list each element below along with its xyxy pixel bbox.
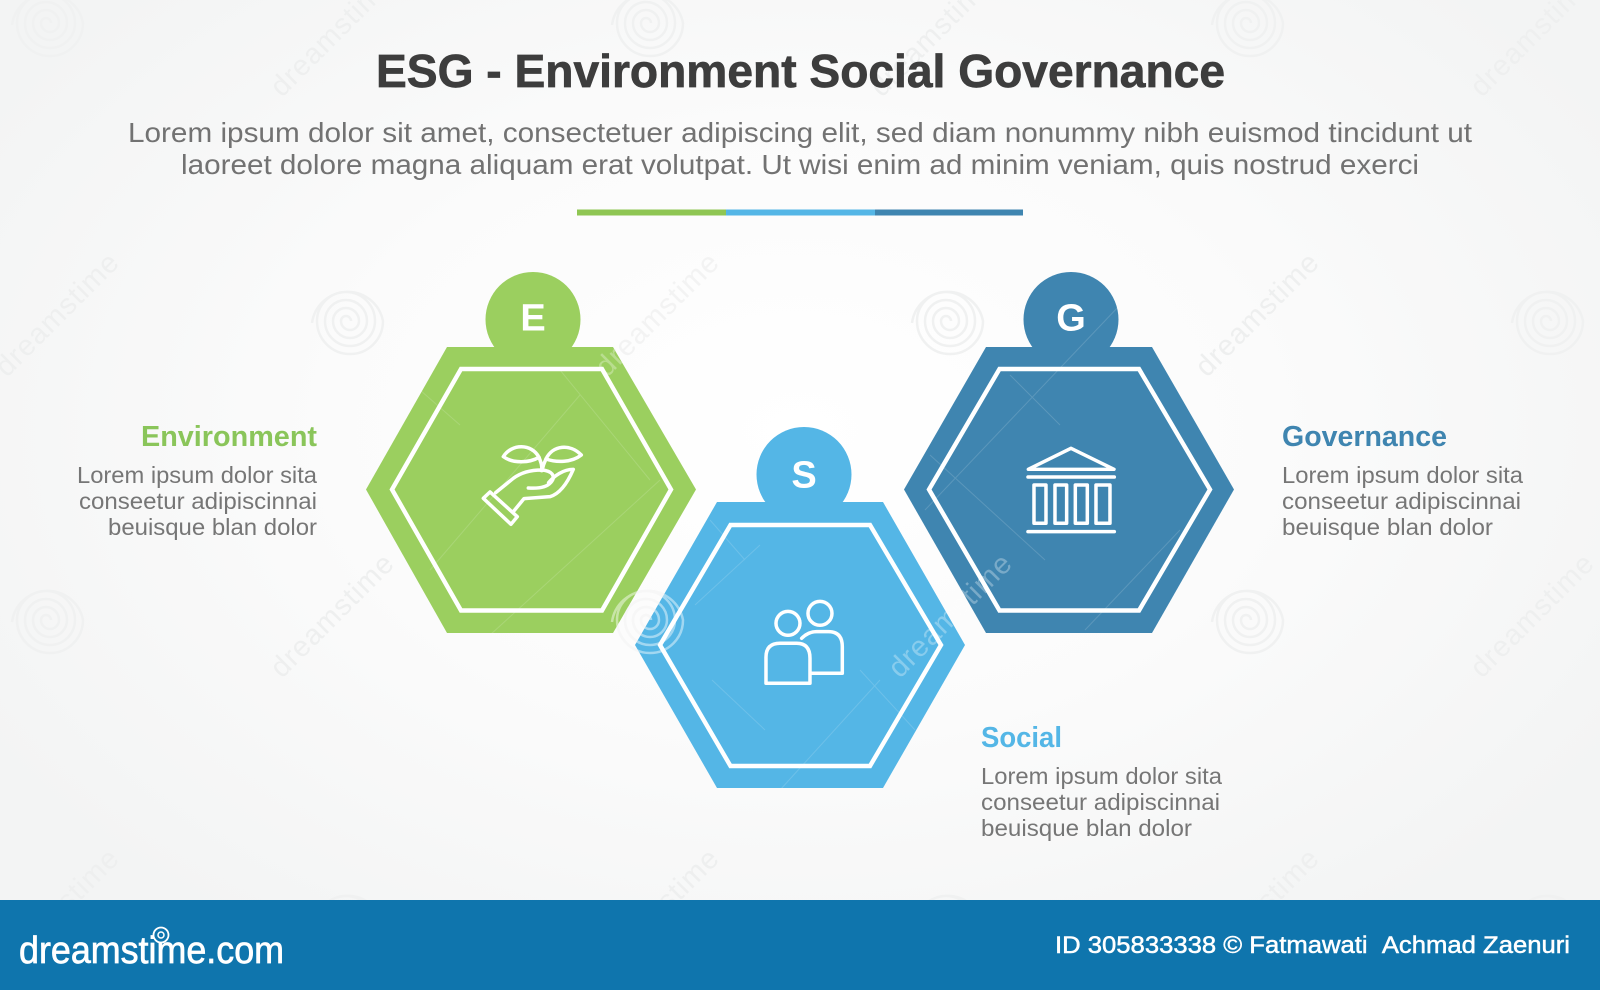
badge circle: E <box>486 272 580 367</box>
icon: hand holding plant <box>483 447 581 524</box>
text block: governance: beuisque blan dolor <box>1282 514 1493 540</box>
text block: governance: Governance <box>1282 421 1447 453</box>
text block: social: Social <box>981 722 1062 754</box>
badge circle: G <box>1024 272 1118 367</box>
subtitle text: laoreet dolore magna aliquam erat volutpat. Ut wisi enim ad minim veniam, quis nostrud exerci <box>181 149 1419 180</box>
watermark pattern: dreamstime <box>264 547 401 684</box>
letter E: E <box>520 298 546 340</box>
letter S: S <box>791 454 817 496</box>
text block: governance: conseetur adipiscinnai <box>1282 488 1521 514</box>
panel: governance hexagon <box>904 272 1234 633</box>
watermark pattern: dreamstime <box>1189 842 1326 979</box>
panel: social hexagon <box>635 427 965 788</box>
inner hexagon outline: governance <box>929 369 1210 610</box>
tricolor divider <box>577 210 1023 216</box>
text block: environment: beuisque blan dolor <box>108 514 317 540</box>
text block: environment <box>77 421 317 540</box>
inner hexagon outline: social <box>660 525 941 766</box>
watermark pattern: dreamstime <box>1189 246 1326 383</box>
panel: environment hexagon <box>366 272 696 633</box>
icon: two people <box>766 601 842 683</box>
text block: environment: conseetur adipiscinnai <box>79 488 317 514</box>
footer band <box>0 900 1600 990</box>
text block: social: conseetur adipiscinnai <box>981 789 1220 815</box>
watermark pattern: dreamstime <box>589 842 726 979</box>
watermark overlay on shapes: dreamstime <box>589 246 726 383</box>
text block: social <box>981 722 1222 841</box>
text block: governance <box>1282 421 1523 540</box>
outer hexagon: governance <box>904 347 1234 633</box>
inner hexagon outline: environment <box>392 369 671 610</box>
text block: governance: Lorem ipsum dolor sita <box>1282 462 1523 488</box>
watermark overlay on shapes <box>420 246 1180 790</box>
title: ESG - Environment Social Governance <box>376 45 1225 97</box>
watermark pattern: dreamstime <box>1464 547 1600 684</box>
badge circle: S <box>756 427 852 522</box>
text block: environment: Environment <box>141 421 317 453</box>
watermark pattern: dreamstime <box>589 246 726 383</box>
text block: social: beuisque blan dolor <box>981 815 1192 841</box>
outer hexagon: social <box>635 502 965 788</box>
subtitle text <box>128 117 1472 180</box>
watermark overlay on shapes: dreamstime <box>882 547 1019 684</box>
text block: social: Lorem ipsum dolor sita <box>981 763 1222 789</box>
footer credit: ID 305833338 © Fatmawati Achmad Zaenuri <box>1055 932 1570 959</box>
outer hexagon: environment <box>366 347 696 633</box>
icon: classical building <box>1028 448 1114 532</box>
footer logo: dreamstime.com: dreamstime.com <box>19 930 284 972</box>
text block: environment: Lorem ipsum dolor sita <box>77 462 317 488</box>
subtitle text: Lorem ipsum dolor sit amet, consectetuer adipiscing elit, sed diam nonummy nibh euismod tincidunt ut <box>128 117 1472 148</box>
letter G: G <box>1056 298 1086 340</box>
